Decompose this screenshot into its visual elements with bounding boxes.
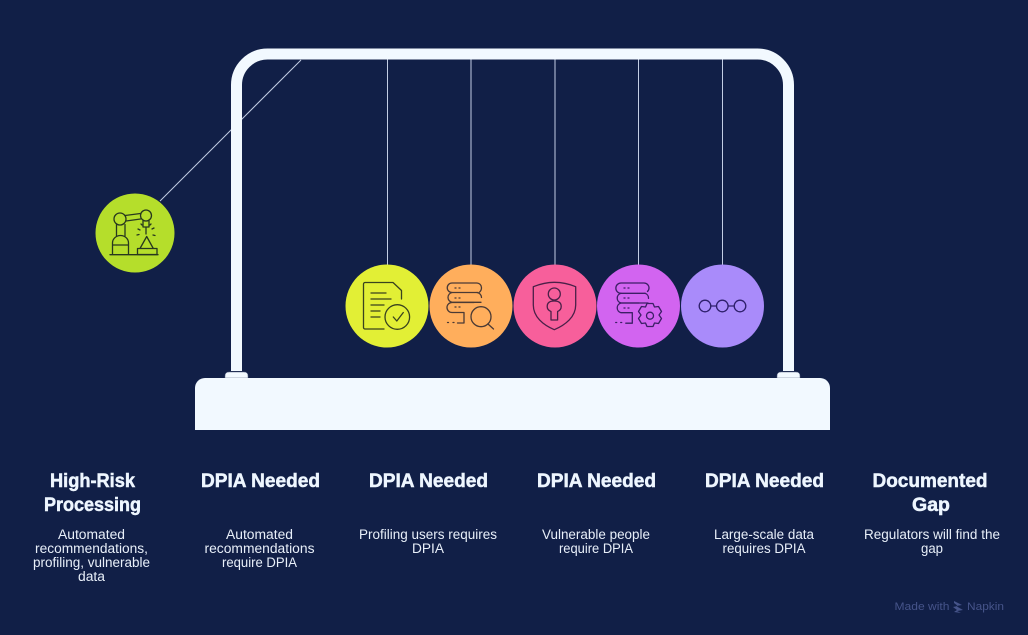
watermark: Made with Napkin: Napkin — [967, 601, 1004, 613]
ball: shield person — [514, 264, 596, 348]
watermark: Made with Napkin: Made with — [894, 601, 950, 613]
cradle frame — [236, 54, 788, 371]
column: automated recommendations: Automated — [226, 527, 293, 542]
column: profiling users — [359, 470, 497, 556]
right foot — [777, 372, 800, 378]
column: profiling users: Profiling users requires — [359, 527, 497, 542]
column: large-scale data — [705, 470, 824, 556]
column: high-risk processing: data — [78, 569, 105, 584]
column: automated recommendations — [201, 470, 320, 570]
column: high-risk processing: recommendations, — [35, 541, 148, 556]
column: high-risk processing: Processing — [44, 494, 141, 516]
column: vulnerable people — [537, 470, 656, 556]
left foot — [225, 372, 248, 378]
column: automated recommendations: recommendations — [204, 541, 315, 556]
column: vulnerable people: Vulnerable people — [542, 527, 650, 542]
column: automated recommendations: DPIA Needed — [201, 470, 320, 492]
watermark: Made with Napkin — [894, 601, 1004, 613]
ball: high-risk processing robot arm — [96, 194, 174, 272]
ball: document check — [346, 264, 428, 348]
column: automated recommendations: require DPIA — [222, 555, 297, 570]
column: high-risk processing: profiling, vulnerable — [33, 555, 150, 570]
column: documented gap: Documented — [872, 470, 988, 492]
ball: server search — [430, 264, 512, 348]
column: high-risk processing: Automated — [58, 527, 125, 542]
cradle strings — [160, 59, 722, 266]
column: vulnerable people: DPIA Needed — [537, 470, 656, 492]
column: documented gap: gap — [921, 541, 943, 556]
column: documented gap: Regulators will find the — [864, 527, 1000, 542]
column: documented gap: Gap — [912, 494, 950, 516]
column: large-scale data: requires DPIA — [722, 541, 806, 556]
column: high-risk processing: High-Risk — [50, 470, 135, 492]
ball: server settings — [597, 264, 680, 348]
column: large-scale data: Large-scale data — [714, 527, 814, 542]
column: vulnerable people: require DPIA — [559, 541, 633, 556]
ball: linked nodes — [681, 264, 764, 348]
cradle base — [195, 378, 830, 430]
column: high-risk processing — [33, 470, 150, 584]
column: profiling users: DPIA Needed — [369, 470, 488, 492]
column: large-scale data: DPIA Needed — [705, 470, 824, 492]
column: documented gap — [864, 470, 1000, 556]
column: profiling users: DPIA — [412, 541, 444, 556]
